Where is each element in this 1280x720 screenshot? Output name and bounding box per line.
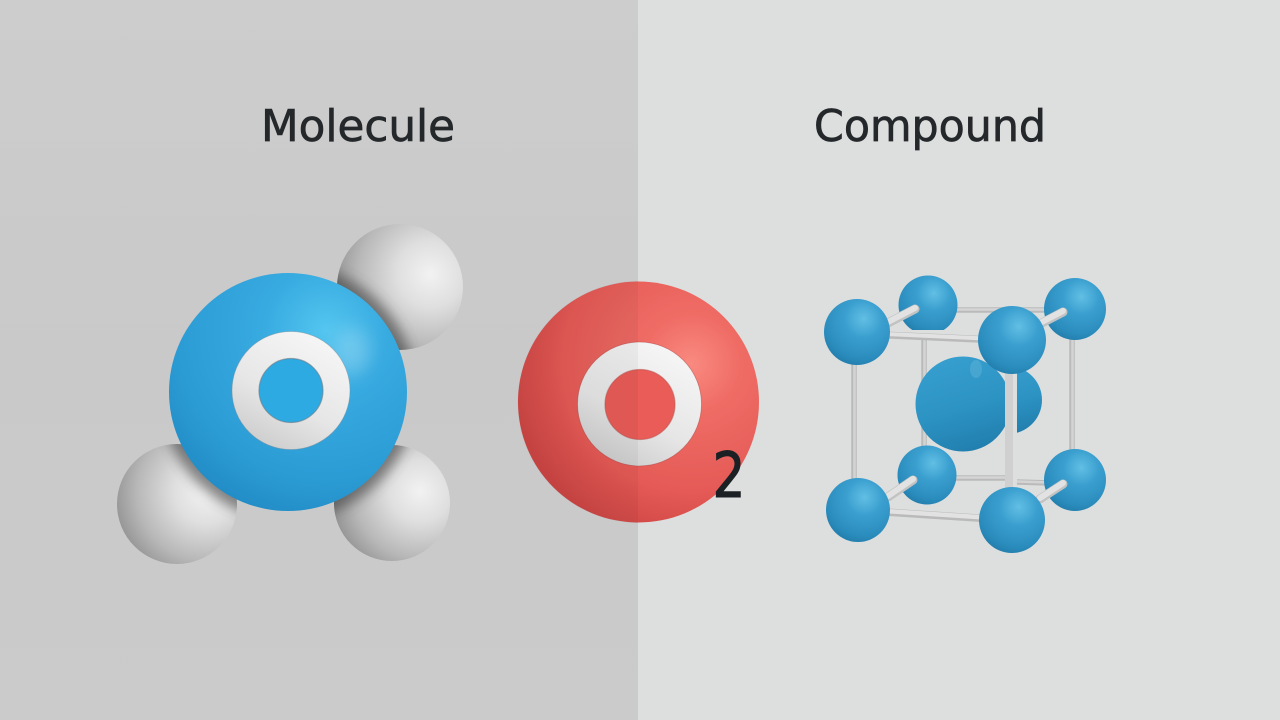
central atom: [916, 356, 1042, 452]
heading: Molecule: Molecule: [261, 101, 455, 152]
front vertical bar: [1005, 365, 1013, 495]
ring: white band: [578, 342, 702, 466]
atom: bottom right white: [334, 445, 450, 561]
ring: white band: [232, 332, 350, 450]
atom: red sphere: [518, 282, 759, 522]
left half shading over sphere: [518, 282, 638, 522]
front atoms: [824, 299, 1046, 553]
ring: red centre: [605, 370, 675, 440]
icon: red oxygen atom: [510, 275, 759, 530]
front horizontal bars: [885, 334, 985, 518]
icon: cubic lattice compound: [824, 276, 1106, 553]
heading: Compound: Compound: [814, 101, 1046, 152]
atom: bottom left white: [117, 444, 237, 564]
icon: molecule with blue centre and three white atoms: [117, 224, 463, 564]
back frame bars: [854, 310, 1072, 485]
atom: central blue sphere: [169, 273, 407, 511]
specular glow: [334, 328, 370, 376]
back frame bar highlights: [854, 310, 1072, 485]
panel: compound background: [638, 0, 1280, 720]
back atoms: [898, 276, 1106, 511]
contact shadow on white atoms: [160, 264, 416, 520]
subscript 2: 2: [712, 439, 746, 512]
panel: molecule background: [0, 0, 638, 720]
connector stubs: [888, 309, 1063, 499]
connector stub highlights: [888, 308, 1063, 498]
ring: blue centre: [259, 358, 323, 422]
atom: top right white: [337, 224, 463, 350]
